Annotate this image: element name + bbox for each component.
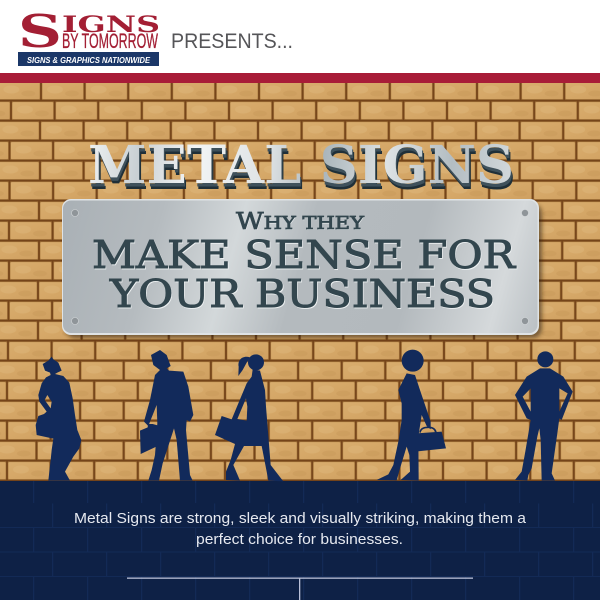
brick wall [0, 82, 600, 482]
person: woman walking with folder [215, 354, 283, 481]
rivets [72, 210, 528, 324]
plate heading: YOUR BUSINESS [110, 273, 496, 317]
logo: Signs By Tomorrow: IGNS [62, 12, 160, 38]
logo: Signs By Tomorrow [18, 5, 160, 66]
plate heading: MAKE SENSE FOR [93, 234, 517, 278]
navy floor [0, 481, 600, 600]
plate heading: MAKE SENSE FOR [92, 233, 517, 277]
silhouettes of people [36, 350, 573, 481]
logo: Signs By Tomorrow: S [18, 5, 62, 58]
person: woman with handbag [377, 350, 446, 481]
title: Metal Signs: METAL SIGNS [90, 141, 516, 202]
logo: Signs By Tomorrow: BY TOMORROW [62, 30, 158, 53]
plate heading: WHY THEY [237, 210, 366, 236]
red header band [0, 73, 600, 83]
person: man with briefcase [140, 350, 193, 481]
plate heading [92, 209, 517, 317]
person: man looking up with bag [36, 357, 81, 481]
intro text: perfect choice for businesses. [196, 532, 403, 548]
title: Metal Signs: METAL SIGNS [89, 138, 515, 200]
plate heading: YOUR BUSINESS [109, 272, 495, 316]
logo: Signs By Tomorrow: SIGNS & GRAPHICS NATIONWIDE [27, 56, 151, 65]
plate heading: WHY THEY [236, 209, 365, 235]
timeline connector lines [127, 578, 473, 600]
presents label: PRESENTS... [171, 30, 293, 53]
intro text [74, 511, 527, 548]
person: man with hands on hips [515, 351, 573, 481]
title: Metal Signs: METAL SIGNS [88, 135, 514, 196]
metal plate [62, 199, 542, 338]
header background [0, 0, 600, 81]
intro text: Metal Signs are strong, sleek and visually striking, making them a [74, 511, 527, 527]
